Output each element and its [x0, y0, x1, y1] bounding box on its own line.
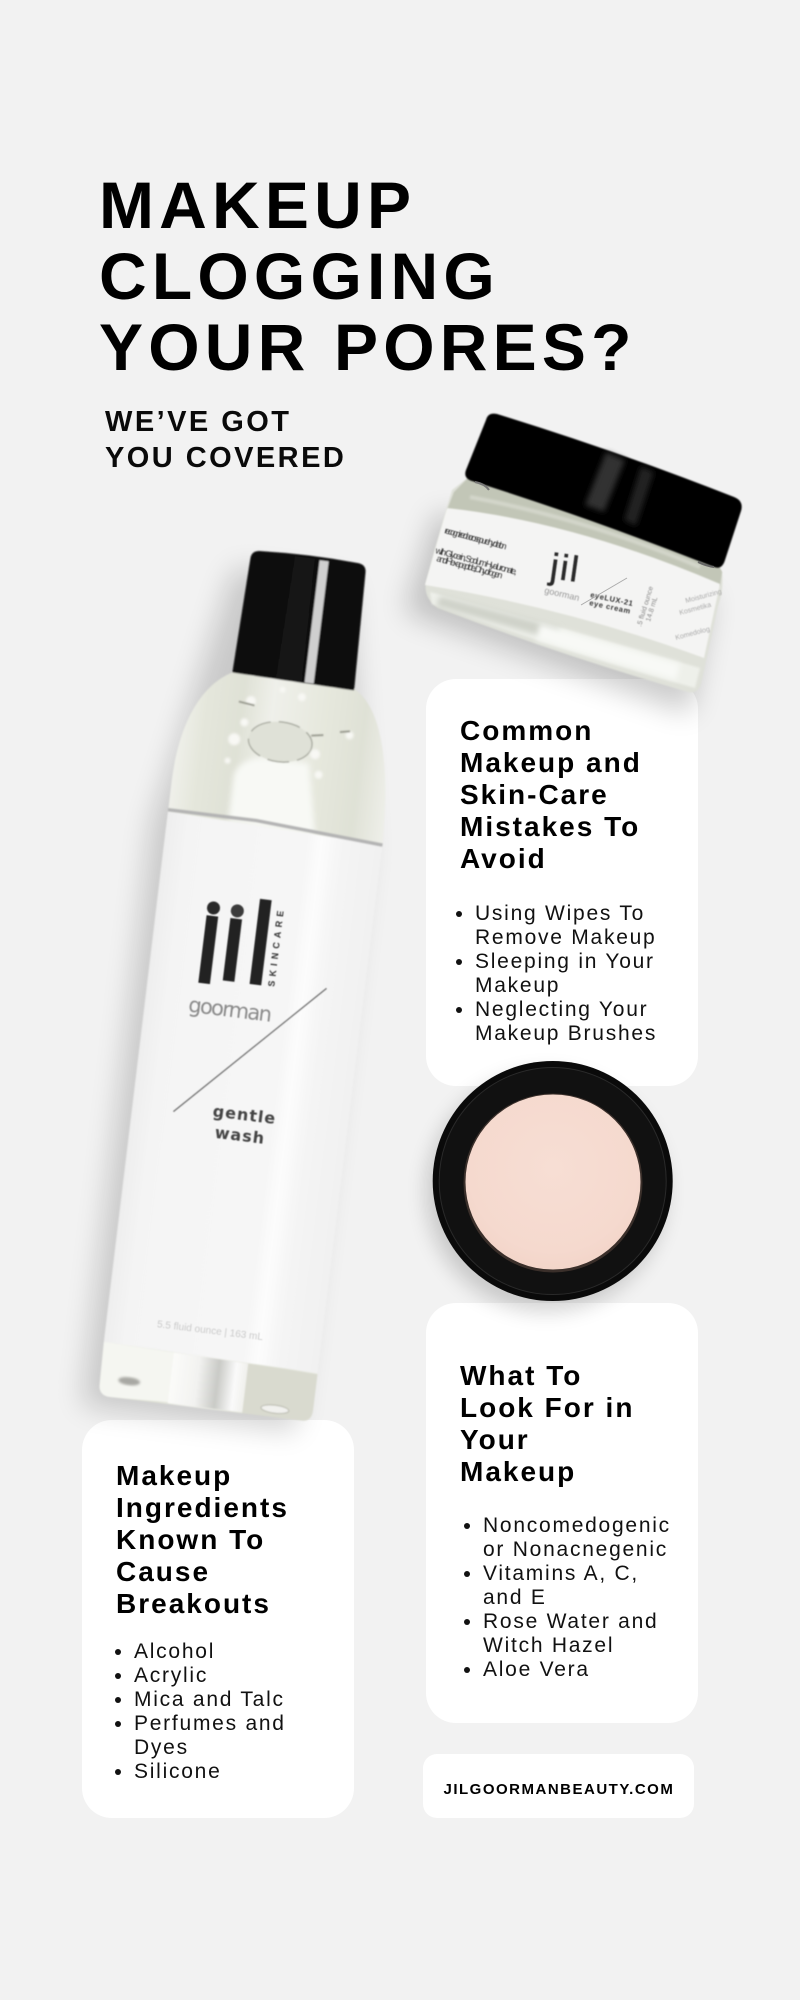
website footer: JILGOORMANBEAUTY.COM [444, 1780, 674, 1798]
heading: what to look for: Look For in [460, 1392, 634, 1423]
heading: common mistakes: Makeup and [460, 747, 642, 778]
list: common mistakes: Neglecting Your [475, 998, 648, 1020]
jar label text [434, 525, 723, 642]
list: common mistakes: Makeup [475, 974, 560, 996]
title: MAKEUP [99, 168, 416, 242]
heading: common mistakes [460, 715, 642, 874]
list: common mistakes: Sleeping in Your [475, 950, 655, 972]
jar label text: .5 fluid ounce [636, 586, 655, 628]
dome air bubbles [224, 681, 358, 782]
compact peach powder [466, 1094, 640, 1270]
subtitle: WE’VE GOT [105, 406, 291, 438]
cap highlight [305, 560, 329, 684]
jar label text: Komedolog [675, 626, 711, 642]
list: ingredients: Silicone [134, 1760, 222, 1783]
jar label [425, 508, 720, 658]
title: CLOGGING [99, 239, 500, 313]
list: what to look for: or Nonacnegenic [483, 1538, 668, 1561]
dome highlight column [228, 755, 324, 836]
heading: ingredients: Known To [116, 1524, 265, 1555]
panel: common mistakes [426, 679, 698, 1086]
list: what to look for: Witch Hazel [483, 1634, 614, 1657]
list: what to look for: Vitamins A, C, [483, 1562, 639, 1585]
heading: what to look for: Makeup [460, 1456, 576, 1487]
product images [74, 412, 743, 1440]
list: ingredients: Mica and Talc [134, 1688, 285, 1711]
heading: ingredients: Ingredients [116, 1492, 289, 1523]
jar label text: recognized across pure hydration [443, 525, 508, 551]
list: what to look for: and E [483, 1586, 547, 1609]
jar label text: 14.8 mL [645, 596, 659, 623]
subtitle: YOU COVERED [105, 442, 346, 474]
logo text: jil [186, 871, 281, 1010]
bottle body [96, 542, 416, 1422]
heading: common mistakes: Mistakes To [460, 811, 640, 842]
jar label text: with Glycerin, Sodium Hyaluronate, [434, 545, 518, 577]
heading: common mistakes: Skin-Care [460, 779, 609, 810]
heading: ingredients: Cause [116, 1556, 210, 1587]
list: what to look for: Rose Water and [483, 1610, 658, 1633]
lid gloss [585, 452, 625, 512]
panel: ingredients to avoid [82, 1420, 354, 1818]
icon: gentle wash bottle [80, 540, 416, 1434]
list: what to look for [464, 1514, 671, 1681]
heading: ingredients: Makeup [116, 1460, 232, 1491]
jar label text: eye cream [589, 598, 632, 616]
heading: ingredients: Breakouts [116, 1588, 271, 1619]
panel: what to look for [426, 1303, 698, 1723]
list: ingredients: Dyes [134, 1736, 189, 1759]
lid rim notches [475, 482, 489, 490]
bottle logo: SKINCARE [266, 906, 286, 987]
list: what to look for: Aloe Vera [483, 1658, 590, 1681]
title: YOUR PORES? [99, 310, 637, 384]
icon: jar of eye cream [405, 414, 742, 714]
bottle cap [232, 548, 370, 690]
bottle base [97, 1342, 174, 1404]
bottle logo: goorman [187, 993, 273, 1027]
heading: what to look for: Your [460, 1424, 530, 1455]
list: common mistakes [456, 902, 657, 1044]
compact black rim [433, 1061, 673, 1301]
glass base reflections [430, 592, 700, 688]
icon: round pressed powder compact [426, 1061, 673, 1312]
bottle logo [157, 898, 328, 1340]
bottle logo: wash [214, 1123, 266, 1148]
subtitle [105, 406, 346, 474]
jar label text: eyeLUX-21 [590, 590, 634, 608]
list: ingredients: Acrylic [134, 1664, 208, 1687]
list: ingredients: Alcohol [134, 1640, 215, 1663]
heading: common mistakes: Avoid [460, 843, 547, 874]
list: ingredients: Perfumes and [134, 1712, 286, 1735]
jar label text: jil [547, 545, 583, 590]
jar glass body [426, 476, 722, 692]
title [99, 168, 637, 384]
heading: common mistakes: Common [460, 715, 593, 746]
jar label text: goorman [544, 585, 580, 603]
jar label text: Moisturizing [685, 588, 723, 605]
website footer [423, 1754, 694, 1818]
list: what to look for: Noncomedogenic [483, 1514, 671, 1537]
bottle label [102, 812, 383, 1373]
heading: what to look for: What To [460, 1360, 582, 1391]
jar label text: and Hexapeptide, Dihydrogen [435, 553, 504, 581]
bottle logo: gentle [212, 1101, 277, 1128]
list: common mistakes: Remove Makeup [475, 926, 656, 948]
silver band [167, 810, 384, 845]
list: common mistakes: Makeup Brushes [475, 1022, 657, 1044]
list: ingredients [115, 1640, 286, 1783]
glass shoulder [447, 478, 722, 586]
jar label text: Kosmetika [679, 602, 712, 617]
list: common mistakes: Using Wipes To [475, 902, 645, 924]
liquid bubble [246, 718, 314, 766]
heading: what to look for [460, 1360, 634, 1487]
bottle logo: 5.5 fluid ounce | 163 mL [156, 1319, 264, 1343]
heading: ingredients [116, 1460, 289, 1619]
jar lid [465, 414, 742, 568]
